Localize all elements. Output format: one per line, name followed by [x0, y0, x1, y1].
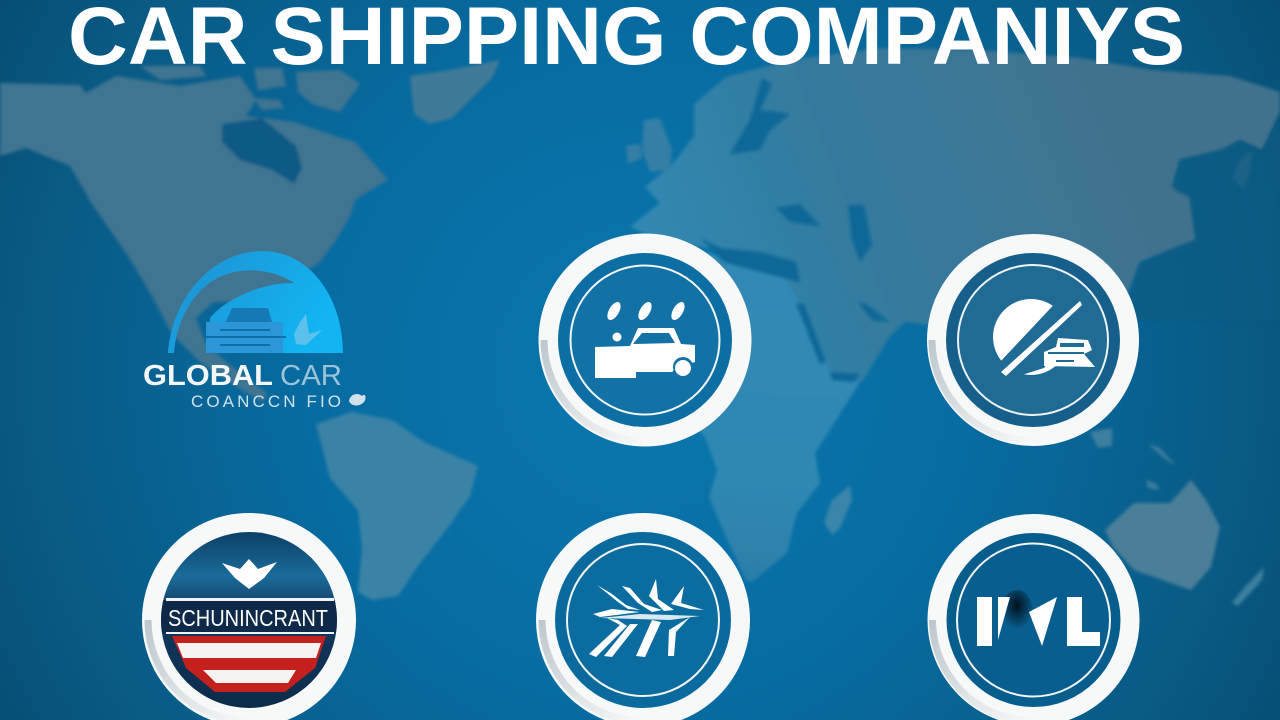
white stripe [177, 643, 321, 658]
map: gulf of aden [830, 372, 860, 382]
ring [538, 234, 752, 446]
disc [555, 532, 731, 708]
ring [927, 234, 1139, 446]
icon: drops [605, 300, 687, 322]
map: japan [1232, 150, 1252, 190]
centre line [593, 609, 640, 617]
disc [161, 532, 337, 708]
map: pacific coast dark [1125, 118, 1280, 320]
map: persian gulf [858, 302, 890, 322]
map: hudson bay [222, 118, 302, 184]
map: seas [700, 78, 890, 382]
band top line [166, 598, 334, 601]
upper strokes [597, 585, 640, 610]
logo ship mast [294, 314, 322, 345]
map: arctic islands [140, 66, 360, 112]
badge: ivl [928, 514, 1140, 720]
ring [536, 513, 750, 720]
map: baltic [730, 78, 790, 154]
crossing line [600, 614, 700, 620]
band and stripes [160, 598, 340, 692]
disc [558, 253, 732, 427]
globe wedge [1000, 296, 1090, 378]
map: new zealand and islands [1090, 428, 1264, 606]
small car details [1048, 343, 1084, 362]
icon: dot [612, 332, 622, 342]
map: australia [1105, 480, 1220, 590]
map: greenland [410, 60, 500, 124]
logo subtitle: COANCCN FIO [191, 392, 341, 411]
disc [946, 533, 1120, 707]
logo: global car [143, 251, 366, 411]
badge: globe and car [927, 234, 1139, 446]
logo name light: CAR [280, 360, 342, 392]
inner ring [570, 266, 720, 414]
icon: drops and car [595, 300, 695, 378]
badge: car with drops [538, 234, 752, 446]
logo name: GLOBAL [143, 360, 273, 392]
dark band [160, 600, 340, 633]
ring shading [544, 340, 645, 441]
inner ring [957, 544, 1110, 696]
ring [928, 514, 1140, 720]
lower strokes [589, 618, 627, 657]
ring shading [148, 620, 249, 720]
slash [1001, 301, 1082, 376]
map: british isles [626, 118, 672, 172]
band bottom line [166, 632, 334, 634]
letter l [1067, 597, 1100, 646]
icon: ivl letters [977, 590, 1100, 646]
world map [0, 48, 1280, 606]
map: black sea [776, 204, 820, 226]
disc [946, 253, 1120, 427]
map: mediterranean [700, 238, 800, 282]
letter v left [998, 597, 1010, 640]
white stripe lower [203, 670, 296, 683]
icon: slashed globe [993, 296, 1095, 378]
logo car [206, 308, 286, 353]
inner ring [958, 265, 1108, 415]
map: south america [316, 412, 478, 600]
badge: schuninchant shield [142, 513, 356, 720]
logo dome crescent [168, 251, 343, 353]
icon: strokes [589, 579, 704, 657]
map: madagascar [824, 485, 852, 535]
shadow [1001, 590, 1033, 634]
inner ring [567, 544, 719, 696]
globe [993, 299, 1069, 375]
ring [142, 513, 356, 720]
letter v right [1029, 597, 1057, 646]
icon: car [595, 328, 695, 378]
letter i [977, 597, 992, 646]
ring shading [932, 620, 1034, 720]
logo small mark [349, 394, 366, 405]
ring shading [932, 340, 1033, 441]
map: north america [0, 76, 388, 402]
map: caspian [848, 205, 872, 262]
map: africa [610, 240, 860, 582]
ring shading [542, 620, 643, 720]
map: red sea [796, 303, 826, 364]
red field [172, 636, 326, 692]
badge: bird strokes [536, 513, 750, 720]
car window [633, 333, 675, 344]
emblem [222, 559, 277, 589]
shield name: SCHUNINCRANT [168, 605, 328, 631]
small car [1044, 338, 1095, 367]
map: eurasia [630, 48, 1280, 400]
car wheel [673, 357, 693, 377]
